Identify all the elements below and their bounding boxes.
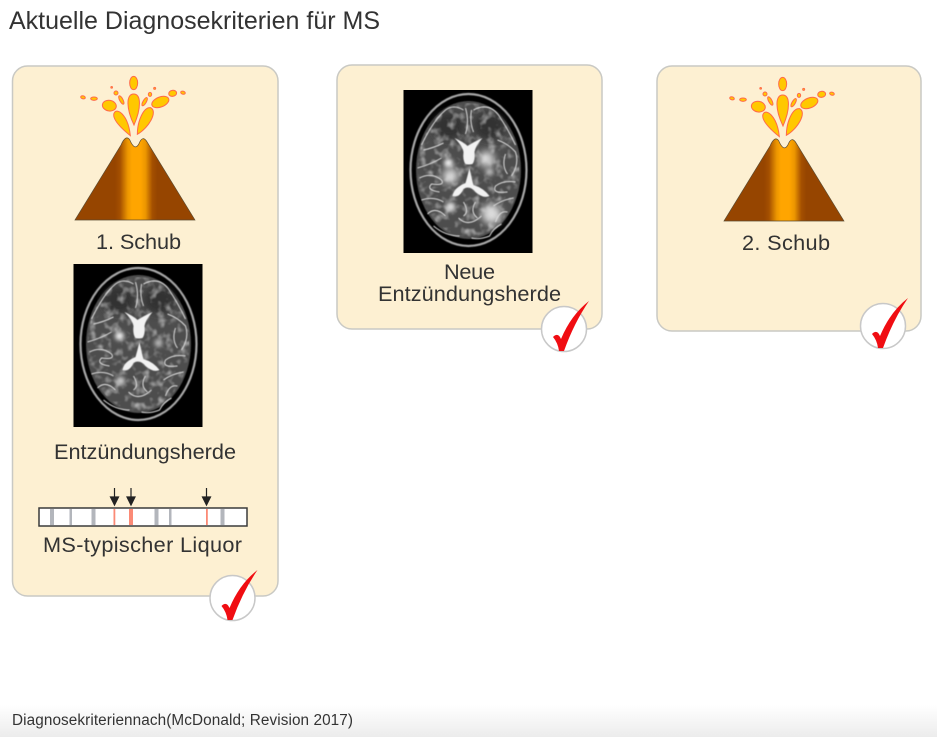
panel: first relapse [12,66,278,620]
panel: second relapse [657,66,921,348]
brain MRI 1 [74,264,202,427]
CSF gel strip [39,488,247,526]
panel background 3 [657,66,921,331]
icon: checkmark 3 [860,298,908,348]
panel background 1 [12,66,278,596]
label: 2. Schub: 2. Schub [742,230,830,255]
label: MS-typischer Liquor: MS-typischer Liquor [43,532,242,557]
brain MRI 2 [404,90,532,253]
title: Aktuelle Diagnosekriterien für MS [9,7,380,35]
icon: volcano 2 [724,77,844,221]
label: Entzündungsherde: Entzündungsherde [54,439,236,464]
icon: checkmark 2 [542,301,589,352]
footer band [0,705,937,737]
icon: volcano 1 [75,76,195,220]
label: Neue Entzündungsherde [378,259,561,306]
icon: checkmark 1 [210,570,258,620]
footnote: Diagnosekriteriennach(McDonald; Revision 2017) [12,712,353,729]
label: Neue Entzündungsherde: Entzündungsherde [378,281,561,306]
panel background 2 [337,65,602,329]
label: 1. Schub: 1. Schub [96,229,181,254]
label: Neue Entzündungsherde: Neue [444,259,495,284]
panel: new lesions [337,65,602,352]
